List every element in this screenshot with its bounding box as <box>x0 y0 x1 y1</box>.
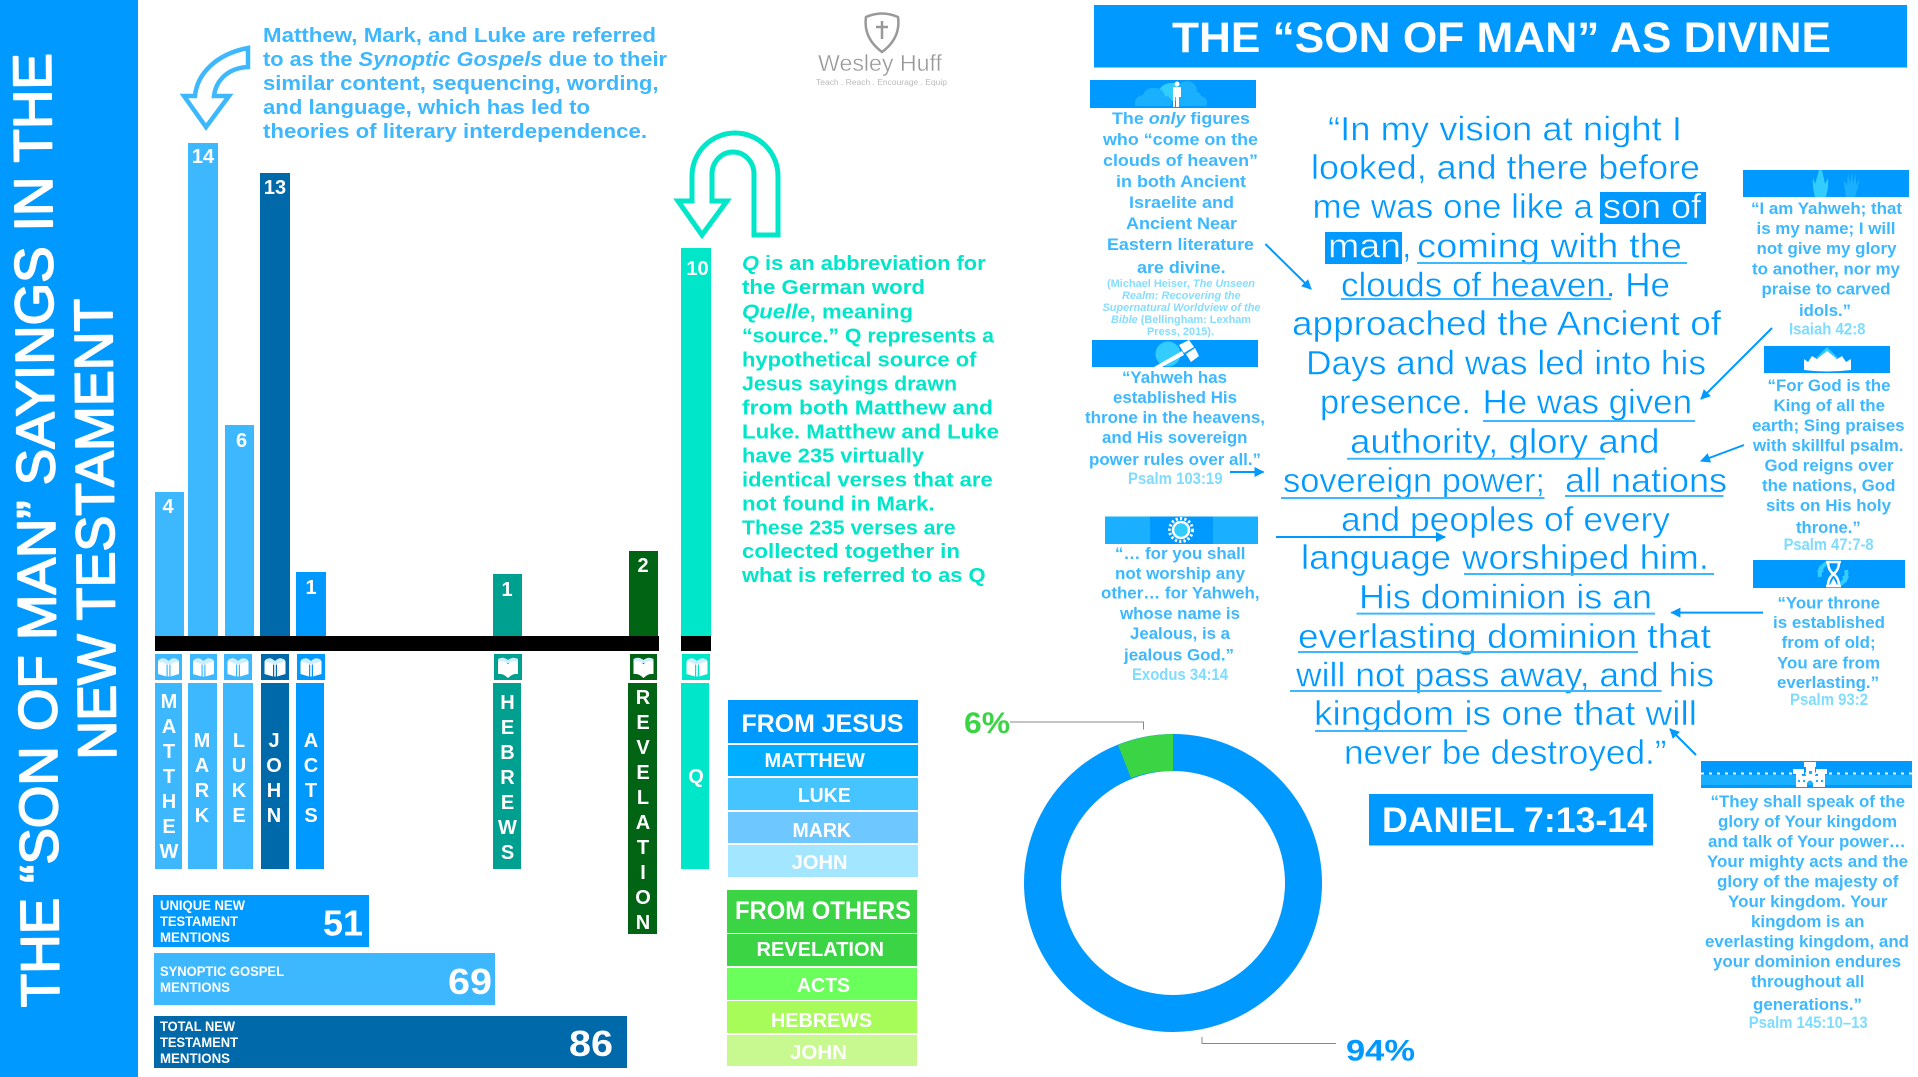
icon: hands <box>1743 170 1909 197</box>
panel: Psalm 93: You are from <box>1777 653 1880 672</box>
panel: Psalm 145: “They shall speak of the <box>1710 792 1905 811</box>
Q explanation: identical verses that are <box>742 470 993 492</box>
panel: Isaiah 42 <box>1743 170 1909 339</box>
panel: Daniel quote: He was given <box>1483 384 1692 422</box>
citation: Bible (Bellingham: Lexham <box>1111 314 1251 326</box>
panel: Isaiah 42: Isaiah 42:8 <box>1789 320 1866 339</box>
panel: clouds of heaven <box>1090 80 1260 338</box>
panel: Psalm 103: throne in the heavens, <box>1085 408 1265 427</box>
panel: Daniel quote: “In my vision at night I <box>1328 110 1682 148</box>
panel: Psalm 93: is established <box>1773 613 1885 632</box>
arrow: Isaiah to quote <box>1701 328 1772 399</box>
sidebar title: NEW TESTAMENT <box>64 298 128 760</box>
synoptic gospels note: similar content, sequencing, wording, <box>263 73 658 95</box>
panel: Psalm 93: everlasting.” <box>1777 673 1879 692</box>
label: Luke: LUKE <box>232 730 247 827</box>
panel: Psalm 145: kingdom is an <box>1751 912 1864 931</box>
legend: from others: FROM OTHERS <box>735 897 911 925</box>
panel: clouds of heaven: Eastern literature <box>1107 235 1254 254</box>
label: 6%: 6% <box>964 707 1010 740</box>
panel: Exodus 34: Exodus 34:14 <box>1132 665 1228 684</box>
citation <box>1102 278 1260 338</box>
label: Acts: ACTS <box>304 730 318 827</box>
panel: Psalm 103: established His <box>1113 388 1237 407</box>
label: 94%: 94% <box>1346 1034 1415 1068</box>
panel: Psalm 47: Psalm 47:7-8 <box>1784 535 1874 554</box>
panel: clouds of heaven: are divine. <box>1137 258 1226 277</box>
legend: from Jesus: LUKE <box>798 785 851 807</box>
panel: Psalm 47: sits on His holy <box>1766 496 1892 515</box>
panel: Isaiah 42: idols.” <box>1799 301 1851 320</box>
panel: Psalm 145: throughout all <box>1751 972 1864 991</box>
bar: John: 13 <box>264 177 286 199</box>
icon: book Revelation <box>630 654 657 680</box>
panel: Psalm 145: Your kingdom. Your <box>1728 892 1888 911</box>
panel: Psalm 103: “Yahweh has <box>1122 368 1227 387</box>
panel: Exodus 34: “… for you shall <box>1115 544 1246 563</box>
panel: Psalm 103 <box>1085 340 1265 488</box>
bar: John <box>260 173 290 636</box>
panel: Psalm 93: from of old; <box>1782 633 1876 652</box>
logo: Wesley Huff <box>818 50 943 76</box>
panel: Daniel quote: all nations <box>1565 462 1727 500</box>
stat: synoptic mentions <box>154 953 495 1005</box>
label: John <box>261 683 289 869</box>
panel: Psalm 145: Your mighty acts and the <box>1707 852 1908 871</box>
bar: Revelation: 2 <box>637 555 649 577</box>
panel: Daniel quote: me was one like a <box>1312 188 1593 226</box>
icon: book Hebrews <box>494 654 522 680</box>
bar: Matthew: 4 <box>162 496 174 518</box>
sidebar title <box>3 52 130 1007</box>
panel: Daniel quote: sovereign power; <box>1283 462 1545 500</box>
arrow: Q u-turn <box>678 133 778 235</box>
citation: (Michael Heiser, The Unseen <box>1107 278 1255 290</box>
panel: Exodus 34: Jealous, is a <box>1130 624 1231 643</box>
panel: clouds of heaven: clouds of heaven” <box>1103 151 1258 170</box>
label: Mark: MARK <box>194 730 210 827</box>
panel: Daniel quote: and peoples of every <box>1341 501 1670 539</box>
panel: Psalm 47: the nations, God <box>1762 476 1895 495</box>
stat: total mentions: 86 <box>569 1023 613 1064</box>
panel: Daniel quote: Days and was led into his <box>1306 344 1706 382</box>
Q explanation: what is referred to as Q <box>741 565 986 587</box>
legend: from others: REVELATION <box>756 939 884 961</box>
panel: clouds of heaven: The only figures <box>1112 109 1250 128</box>
panel: Daniel quote: presence. <box>1320 384 1471 422</box>
legend: from Jesus: MATTHEW <box>764 750 865 772</box>
stat: total mentions: TESTAMENT <box>160 1034 238 1050</box>
panel: Daniel quote: that <box>1647 618 1712 656</box>
panel: Psalm 103: power rules over all.” <box>1089 450 1261 469</box>
bar: Q: 10 <box>686 258 709 280</box>
panel: Daniel quote: coming with the <box>1417 228 1682 266</box>
icon: book Matthew <box>155 654 182 680</box>
synoptic gospels note: Matthew, Mark, and Luke are referred <box>263 25 656 47</box>
panel: Psalm 47: throne.” <box>1796 518 1861 537</box>
panel: Daniel quote: everlasting dominion <box>1298 618 1637 656</box>
panel: Isaiah 42: “I am Yahweh; that <box>1751 199 1902 218</box>
panel: Daniel quote: will not pass away, and his <box>1295 656 1714 694</box>
panel: Psalm 145: generations.” <box>1753 995 1862 1014</box>
panel: Daniel quote: authority, glory and <box>1350 423 1660 461</box>
icon: crown <box>1764 346 1890 373</box>
panel: Psalm 93 <box>1753 560 1905 709</box>
panel: Daniel quote: clouds of heaven. He <box>1341 266 1670 304</box>
panel: Psalm 145: Psalm 145:10–13 <box>1749 1013 1868 1032</box>
Q explanation: Jesus sayings drawn <box>742 374 957 396</box>
Q explanation: from both Matthew and <box>742 398 993 420</box>
bar: Luke: 6 <box>236 430 247 452</box>
arrow: Exodus to quote <box>1276 536 1445 538</box>
reference: Daniel 7:13-14 <box>1369 794 1653 846</box>
stat: synoptic mentions: MENTIONS <box>160 979 230 995</box>
sidebar title: THE “SON OF MAN” SAYINGS IN THE <box>3 53 71 1007</box>
panel: Daniel quote <box>1281 110 1727 772</box>
arrow: Psalm 47 to quote <box>1701 445 1744 461</box>
panel: clouds of heaven: Israelite and <box>1129 193 1234 212</box>
panel: Isaiah 42: to another, nor my <box>1752 260 1901 278</box>
citation: Supernatural Worldview of the <box>1102 302 1260 314</box>
bar: Mark: 14 <box>192 146 215 168</box>
title banner: THE “SON OF MAN” AS DIVINE <box>1172 14 1831 62</box>
label: Matthew: MATTHEW <box>160 691 179 863</box>
book name columns <box>155 683 709 934</box>
bar: Revelation <box>629 551 658 636</box>
panel: Daniel quote: His dominion is an <box>1359 578 1652 616</box>
synoptic gospels note: to as the Synoptic Gospels due to their <box>263 49 667 71</box>
Q explanation: “source.” Q represents a <box>742 326 995 348</box>
bar: Hebrews <box>493 574 522 636</box>
legend: from others: HEBREWS <box>771 1010 872 1032</box>
Q explanation: collected together in <box>742 541 960 563</box>
label: Revelation: REVELATION <box>635 687 651 934</box>
Q explanation: Luke. Matthew and Luke <box>742 422 999 444</box>
panel: Daniel quote: approached the Ancient of <box>1292 305 1722 343</box>
label: 6% <box>964 707 1144 740</box>
panel: Psalm 145: your dominion endures <box>1713 952 1901 971</box>
panel: clouds of heaven: Ancient Near <box>1126 214 1237 233</box>
panel: Daniel quote: , <box>1402 228 1411 266</box>
axis <box>155 636 711 651</box>
citation: Realm: Recovering the <box>1122 290 1241 302</box>
panel: Daniel quote: never be destroyed.” <box>1344 734 1666 772</box>
panel: Exodus 34: jealous God.” <box>1123 646 1234 664</box>
logo: Teach . Reach . Encourage . Equip <box>816 77 947 87</box>
bar: Luke <box>225 425 254 636</box>
panel: Daniel quote: son of <box>1603 188 1702 226</box>
legend: from others <box>727 890 917 1066</box>
Q explanation: Quelle , meaning <box>742 302 913 324</box>
panel: Daniel quote: looked, and there before <box>1311 149 1700 187</box>
panel: Daniel quote: worshiped him. <box>1461 539 1709 577</box>
panel: Isaiah 42: is my name; I will <box>1756 219 1896 238</box>
Q explanation: These 235 verses are <box>742 518 956 540</box>
icon: book Luke <box>224 654 252 680</box>
icon: figure on clouds <box>1090 80 1256 108</box>
arrow: Psalm 93 to quote <box>1671 612 1763 614</box>
stat: total mentions <box>154 1016 627 1068</box>
panel: Isaiah 42: praise to carved <box>1762 280 1890 298</box>
Q explanation: the German word <box>742 277 925 299</box>
legend: from Jesus: FROM JESUS <box>742 710 904 738</box>
stat: unique mentions: MENTIONS <box>160 929 230 945</box>
arrow: clouds to quote <box>1265 244 1311 289</box>
title banner <box>1094 5 1907 68</box>
bar: Mark <box>188 143 218 636</box>
legend: from Jesus <box>728 700 918 877</box>
label: Luke <box>223 683 253 869</box>
label: Mark <box>188 683 217 869</box>
stat: total mentions: TOTAL NEW <box>160 1018 236 1034</box>
book icons row <box>155 654 710 680</box>
panel: Exodus 34: not worship any <box>1115 564 1246 583</box>
panel: Exodus 34: whose name is <box>1119 604 1240 623</box>
panel: Psalm 145: everlasting kingdom, and <box>1705 932 1909 951</box>
icon: book Mark <box>190 654 217 680</box>
Q explanation: hypothetical source of <box>742 350 977 372</box>
sidebar panel <box>0 0 138 1077</box>
label: Q: Q <box>688 766 704 788</box>
stat: unique mentions: 51 <box>323 902 363 944</box>
label: Revelation <box>628 683 657 934</box>
icon: hourglass <box>1753 560 1905 588</box>
panel: Psalm 145: and talk of Your power… <box>1708 832 1906 851</box>
label: Matthew <box>155 683 182 869</box>
Q explanation: Q is an abbreviation for <box>742 253 986 275</box>
stat: unique mentions <box>153 895 369 947</box>
donut segment: 6% <box>1118 734 1173 778</box>
panel: Exodus 34: other… for Yahweh, <box>1101 584 1260 602</box>
panel: Psalm 47: “For God is the <box>1768 376 1890 395</box>
reference: Daniel 7:13-14: DANIEL 7:13-14 <box>1382 801 1648 840</box>
panel: Psalm 47 <box>1752 346 1905 554</box>
stat: synoptic mentions: SYNOPTIC GOSPEL <box>160 963 284 979</box>
panel: Daniel quote: language <box>1301 539 1451 577</box>
panel: Psalm 145: glory of Your kingdom <box>1718 812 1897 831</box>
stat: unique mentions: TESTAMENT <box>160 913 238 929</box>
bar: Acts: 1 <box>305 577 317 599</box>
Q explanation: not found in Mark. <box>742 494 935 516</box>
label: John: JOHN <box>266 730 282 827</box>
arrow: Psalm 103 to quote <box>1230 471 1264 473</box>
synoptic gospels note <box>263 25 667 143</box>
panel: clouds of heaven: who “come on the <box>1102 130 1258 149</box>
panel: Daniel quote: man <box>1328 228 1401 266</box>
panel: Isaiah 42: not give my glory <box>1756 239 1897 258</box>
panel: Psalm 103: and His sovereign <box>1102 428 1248 447</box>
panel: Psalm 93: “Your throne <box>1778 594 1880 612</box>
icon: shield <box>866 14 898 52</box>
label: Q <box>681 683 709 869</box>
highlight: son of man <box>1325 192 1706 264</box>
donut chart <box>964 707 1415 1068</box>
label: Hebrews: HEBREWS <box>498 692 517 864</box>
label: Hebrews <box>493 683 521 869</box>
arrow: Psalm 145 to quote <box>1670 729 1696 755</box>
bar chart: sayings by book <box>155 143 711 651</box>
Q explanation: have 235 virtually <box>742 446 925 468</box>
panel: Exodus 34 <box>1101 516 1260 684</box>
legend: from others: JOHN <box>790 1042 847 1064</box>
legend: from Jesus: MARK <box>792 820 852 842</box>
stat: unique mentions: UNIQUE NEW <box>160 897 246 913</box>
panel: Psalm 47: King of all the <box>1774 396 1885 415</box>
panel: Psalm 145 <box>1701 761 1912 1032</box>
bar: Q <box>681 248 711 636</box>
label: Acts <box>296 683 324 869</box>
Q explanation <box>741 253 999 587</box>
icon: castle <box>1701 761 1912 788</box>
underlines <box>1281 263 1724 731</box>
panel: Psalm 93: Psalm 93:2 <box>1790 690 1868 709</box>
icon: sun <box>1105 516 1258 544</box>
arrow: synoptic curved <box>184 48 248 127</box>
label: 94% <box>1202 1034 1415 1068</box>
legend: from Jesus: JOHN <box>792 852 848 874</box>
citation: Press, 2015). <box>1147 326 1214 338</box>
icon: book John <box>261 654 289 680</box>
bar: Hebrews: 1 <box>501 579 513 601</box>
legend: from others: ACTS <box>797 975 850 997</box>
bar: Matthew <box>155 492 184 636</box>
stat: total mentions: MENTIONS <box>160 1050 230 1066</box>
bar: Acts <box>296 572 326 636</box>
panel: Psalm 145: glory of the majesty of <box>1717 872 1899 891</box>
panel: clouds of heaven: in both Ancient <box>1116 172 1246 191</box>
panel: Psalm 47: God reigns over <box>1764 456 1894 475</box>
panel: Psalm 47: earth; Sing praises <box>1752 416 1905 435</box>
logo <box>816 14 947 87</box>
panel: Psalm 103: Psalm 103:19 <box>1128 469 1222 488</box>
icon: book Q <box>682 654 710 680</box>
icon: book Acts <box>297 654 325 680</box>
panel: Psalm 47: with skillful psalm. <box>1752 436 1904 455</box>
panel: Daniel quote: kingdom is one that will <box>1314 695 1697 733</box>
stat: synoptic mentions: 69 <box>448 961 492 1002</box>
synoptic gospels note: theories of literary interdependence. <box>263 121 647 143</box>
icon: gavel <box>1092 340 1258 367</box>
synoptic gospels note: and language, which has led to <box>263 97 590 119</box>
